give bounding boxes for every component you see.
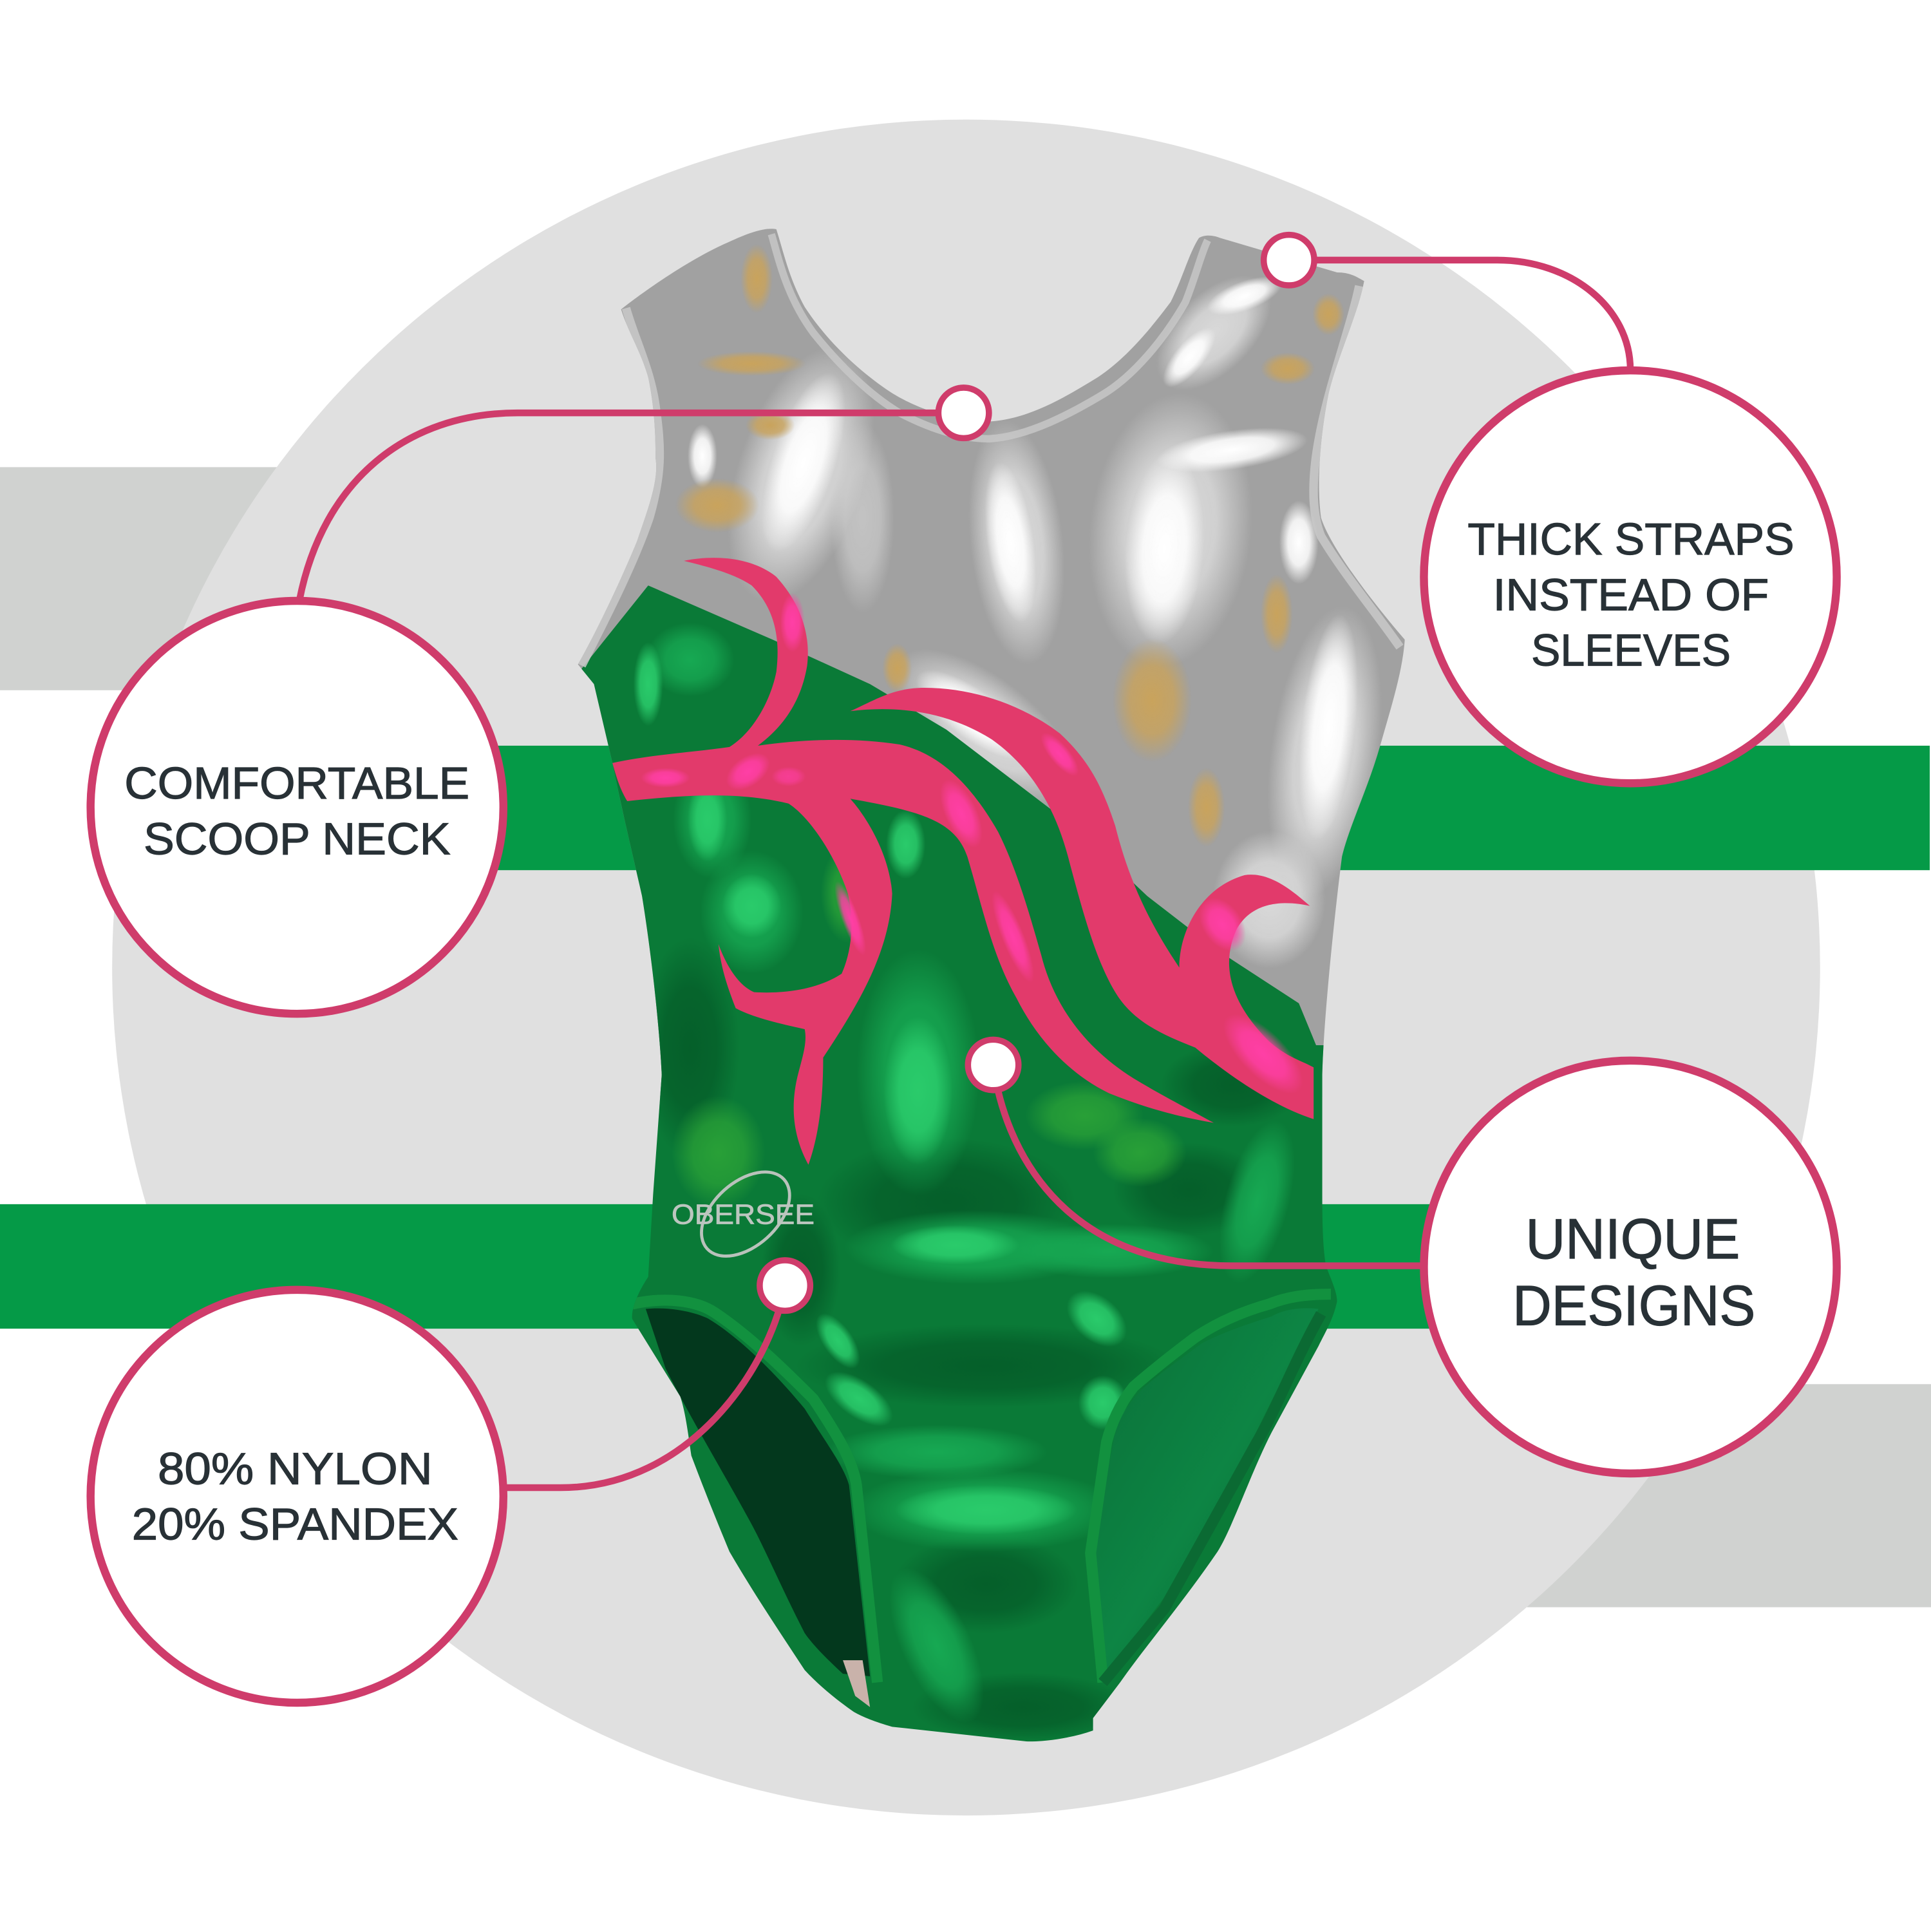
connector: thick straps — [1289, 260, 1630, 370]
marker dot: fabric — [760, 1260, 810, 1311]
callout: thick straps: THICK STRAPS — [1467, 514, 1794, 564]
marker dot: straps — [1264, 235, 1314, 285]
callout: thick straps: INSTEAD OF — [1493, 569, 1769, 620]
swirl: left hook and main band — [612, 558, 1214, 1165]
callout: thick straps: SLEEVES — [1531, 625, 1731, 675]
callout: comfortable scoop neck: SCOOP NECK — [144, 813, 451, 864]
green band: upper right — [297, 746, 1930, 870]
callout: comfortable scoop neck: COMFORTABLE — [124, 758, 469, 808]
green lower fabric — [581, 585, 1337, 1741]
callout: fabric composition: 80% NYLON — [158, 1443, 433, 1493]
swirl shine — [641, 593, 1315, 1106]
callout: unique designs: DESIGNS — [1512, 1273, 1755, 1337]
brand logo: OBERSEE — [672, 1155, 815, 1273]
callout: thick straps — [1424, 370, 1837, 783]
silver and green seams — [581, 234, 1400, 1682]
green band: lower left — [0, 1204, 1630, 1329]
marker dot: neck — [938, 388, 989, 438]
marker dot: design — [968, 1039, 1019, 1090]
background band: upper left grey — [0, 467, 493, 690]
silver upper fabric — [554, 209, 1442, 1097]
callout: unique designs — [1424, 1061, 1837, 1473]
swirl: right band and tip — [851, 688, 1314, 1119]
callout: fabric composition — [91, 1290, 504, 1703]
connector: fabric — [505, 1285, 785, 1488]
callout: comfortable scoop neck — [91, 601, 504, 1014]
callout: fabric composition: 20% SPANDEX — [132, 1499, 458, 1549]
leotard illustration — [554, 209, 1442, 1763]
connector: unique designs — [994, 1065, 1424, 1266]
pink appliqué swirls — [612, 558, 1314, 1165]
leg openings — [646, 1308, 1319, 1707]
fabric body — [554, 209, 1442, 1763]
brand logo: OBERSEE: OBERSEE — [672, 1198, 815, 1230]
background circle — [112, 120, 1820, 1815]
callout: unique designs: UNIQUE — [1525, 1207, 1740, 1271]
background band: lower right grey — [1417, 1384, 1931, 1607]
connector: scoop neck — [299, 413, 964, 600]
